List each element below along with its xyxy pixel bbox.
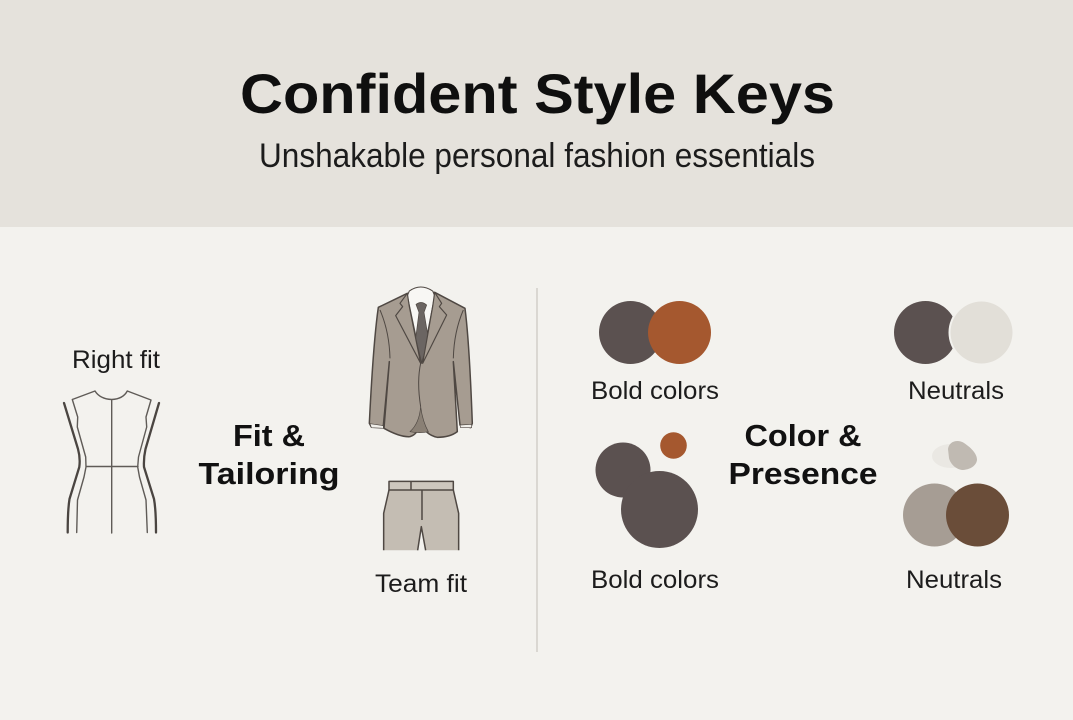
- label: bold colors top: Bold colors: [591, 377, 719, 405]
- label: team fit: Team fit: [375, 570, 467, 598]
- label: neutrals top: Neutrals: [908, 377, 1004, 405]
- swatches: bold colors top: [599, 301, 711, 364]
- subtitle: Unshakable personal fashion essentials: [259, 137, 815, 175]
- heading: fit and tailoring: [198, 418, 340, 491]
- heading: fit and tailoring: Tailoring: [198, 456, 340, 491]
- label: right fit: Right fit: [72, 346, 160, 374]
- header band: [0, 0, 1073, 227]
- swatches: neutrals pebbles: [932, 441, 977, 470]
- icon: fitted bodice: [64, 391, 159, 533]
- swatches: neutrals top: [894, 300, 1014, 366]
- heading: fit and tailoring: Fit &: [233, 418, 305, 453]
- label: neutrals bottom: Neutrals: [906, 566, 1002, 594]
- icon: trousers: [384, 481, 459, 550]
- heading: color and presence: Presence: [728, 456, 878, 491]
- label: bold colors bottom: Bold colors: [591, 566, 719, 594]
- swatches: neutrals bottom: [903, 484, 1009, 546]
- heading: color and presence: Color &: [744, 418, 862, 453]
- heading: color and presence: [728, 418, 878, 491]
- icon: suit jacket: [369, 287, 472, 437]
- swatches: bold colors bottom: [596, 432, 698, 548]
- title: Confident Style Keys: [240, 62, 835, 125]
